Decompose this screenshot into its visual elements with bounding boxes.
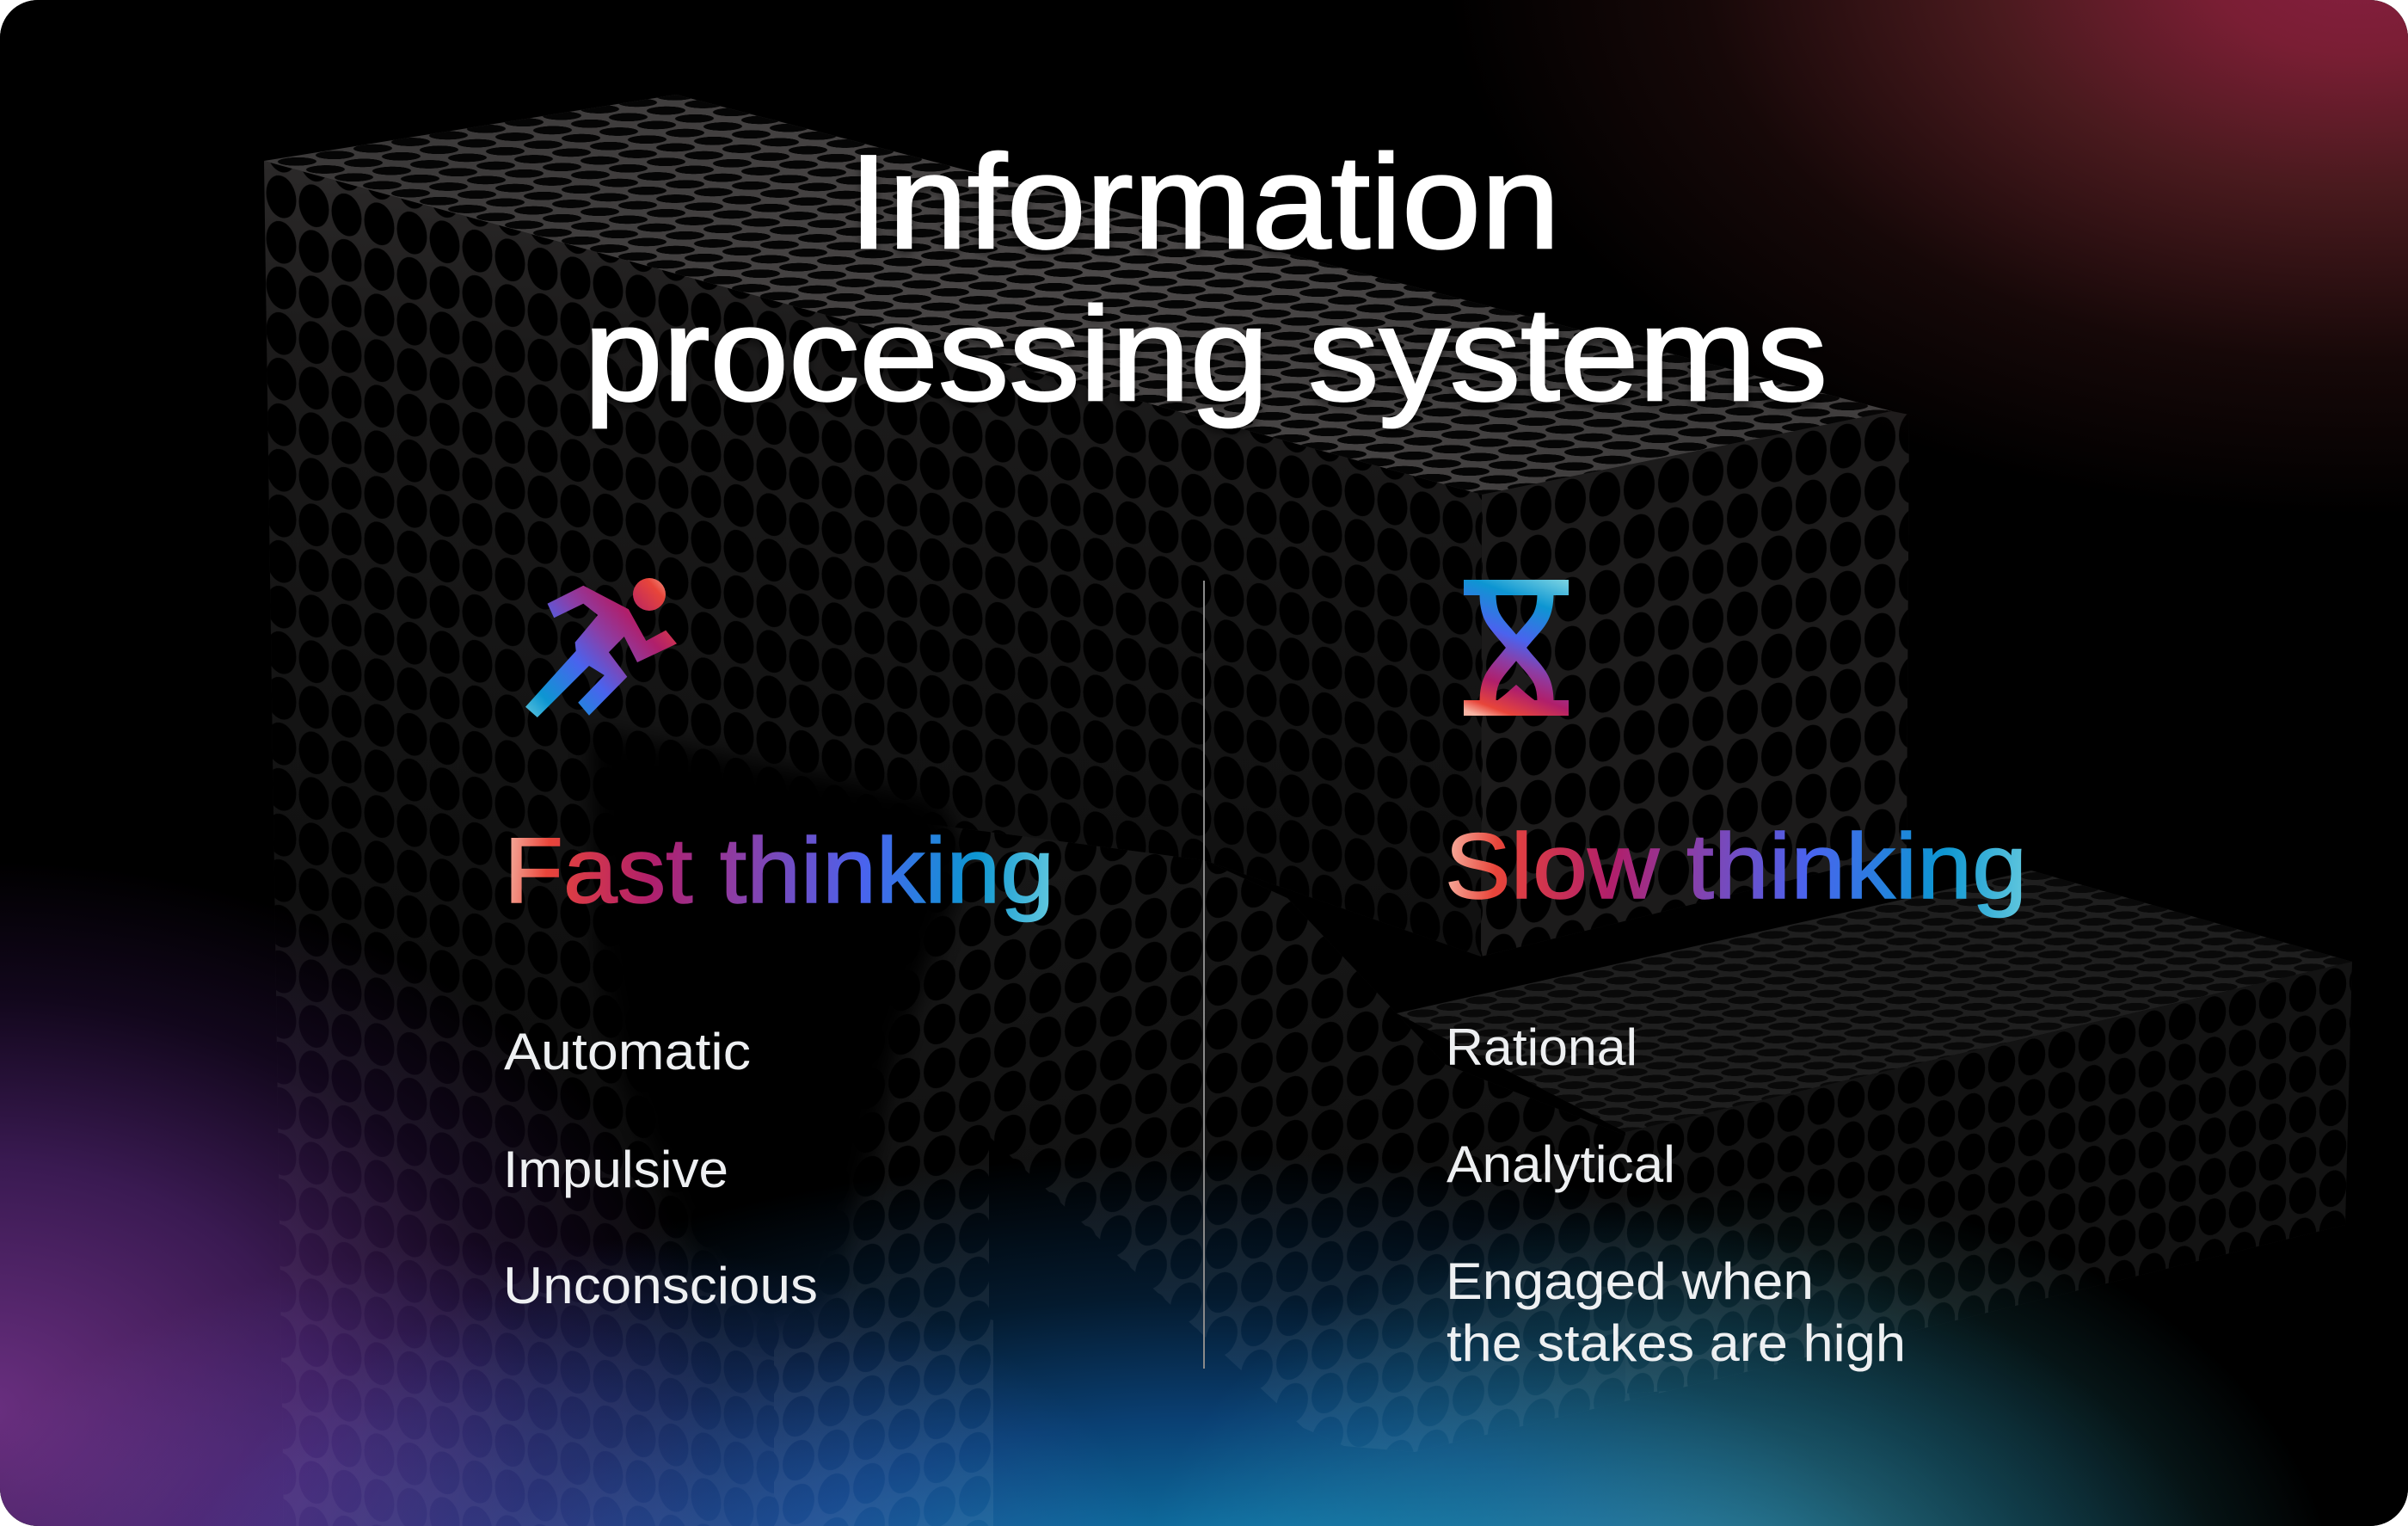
title: processing systems: [584, 280, 1828, 428]
list: fast thinking traits: Unconscious: [503, 1257, 818, 1314]
list: slow thinking traits: Analytical: [1447, 1135, 1675, 1193]
icon: hourglass: [1464, 580, 1569, 716]
divider: [1203, 581, 1205, 1369]
heading: fast thinking: Fast thinking: [504, 818, 1054, 922]
title: [584, 127, 1828, 428]
low block top face: [1397, 871, 2352, 1132]
list: slow thinking traits: [1446, 1018, 1906, 1372]
central lower block face: [774, 817, 1668, 1526]
dark wedge face: [989, 1136, 1344, 1446]
title: Information: [849, 127, 1560, 276]
large block top face: [264, 95, 1892, 495]
low block right face: [1625, 962, 2352, 1394]
large block right face: [1481, 411, 1909, 957]
heading: slow thinking: Slow thinking: [1445, 814, 2027, 918]
list: fast thinking traits: Impulsive: [503, 1141, 728, 1198]
list: fast thinking traits: Automatic: [504, 1023, 751, 1080]
large perforated block: [264, 95, 1909, 1526]
large block left face: [264, 161, 1482, 1526]
black shadow blob: [589, 731, 972, 1342]
low block: [1397, 871, 2352, 1394]
list: slow thinking traits: Rational: [1446, 1018, 1637, 1076]
list: slow thinking traits: Engaged when: [1446, 1252, 1814, 1310]
list: slow thinking traits: the stakes are high: [1447, 1314, 1906, 1372]
icon: running person: [525, 578, 677, 717]
list: fast thinking traits: [503, 1023, 818, 1314]
